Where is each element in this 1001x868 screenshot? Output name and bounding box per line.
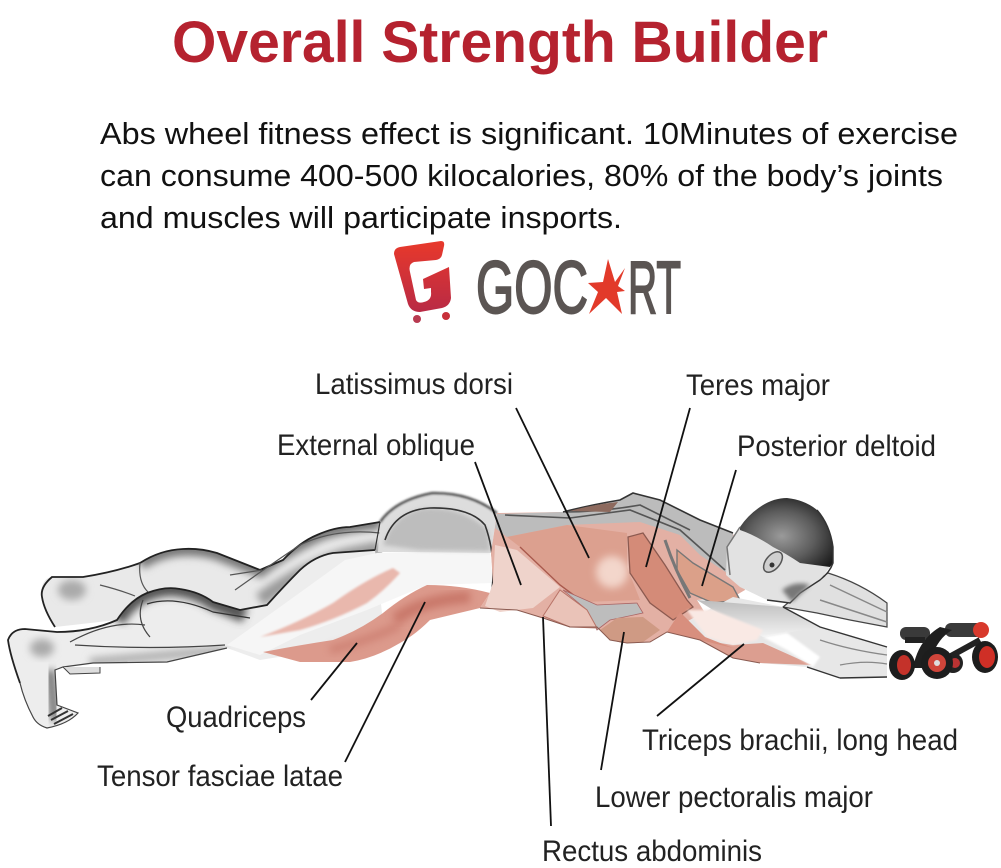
rear leg: [42, 522, 385, 627]
far arm: [783, 573, 887, 627]
torso underside contour: [480, 608, 760, 663]
muscle: external oblique: [485, 545, 560, 612]
muscle: lower pectoralis: [600, 617, 660, 643]
muscle labels: Quadriceps: [166, 701, 306, 734]
description text: Abs wheel fitness effect is significant. 10Minutes of exercise: [100, 116, 958, 151]
wordmark: GOC: [476, 246, 588, 329]
description text: can consume 400-500 kilocalories, 80% of the body’s joints: [100, 158, 943, 193]
muscle labels: Posterior deltoid: [737, 430, 936, 463]
muscle labels: Teres major: [686, 369, 830, 402]
front leg: [8, 550, 385, 728]
muscle: latissimus dorsi: [507, 525, 640, 602]
logo: Gocart: RT: [628, 246, 681, 329]
torso base: [480, 493, 745, 658]
lower abdominal segments: [543, 590, 597, 628]
muscle labels: Latissimus dorsi: [315, 368, 513, 401]
logo: Gocart: [394, 241, 681, 329]
title: Overall Strength Builder: [172, 10, 828, 75]
muscle labels: External oblique: [277, 429, 475, 462]
muscle labels: Rectus abdominis: [542, 835, 762, 868]
icon: star: [588, 259, 625, 314]
head: [726, 498, 833, 603]
muscle labels: Lower pectoralis major: [595, 781, 873, 814]
icon: abs wheel product: [888, 590, 1001, 690]
upper back grey muscles: [495, 493, 733, 575]
icon: cart G: [394, 241, 451, 323]
thigh white band: [227, 553, 493, 655]
muscle: posterior deltoid: [677, 550, 740, 603]
muscle labels: [97, 368, 958, 868]
muscle: tensor fasciae latae: [260, 568, 400, 637]
muscle labels: Tensor fasciae latae: [97, 760, 343, 793]
muscle: triceps: [667, 632, 812, 665]
muscle labels: Triceps brachii, long head: [642, 724, 958, 757]
muscle: quadriceps: [263, 585, 490, 662]
near arm: [667, 597, 887, 678]
muscle: teres major: [628, 533, 693, 620]
glute: [375, 493, 497, 590]
anatomy figure: [8, 493, 887, 728]
ear: [760, 548, 786, 576]
description text: and muscles will participate insports.: [100, 200, 622, 235]
serratus grey: [563, 590, 643, 630]
leader lines: [311, 408, 744, 826]
description text: [100, 116, 958, 235]
